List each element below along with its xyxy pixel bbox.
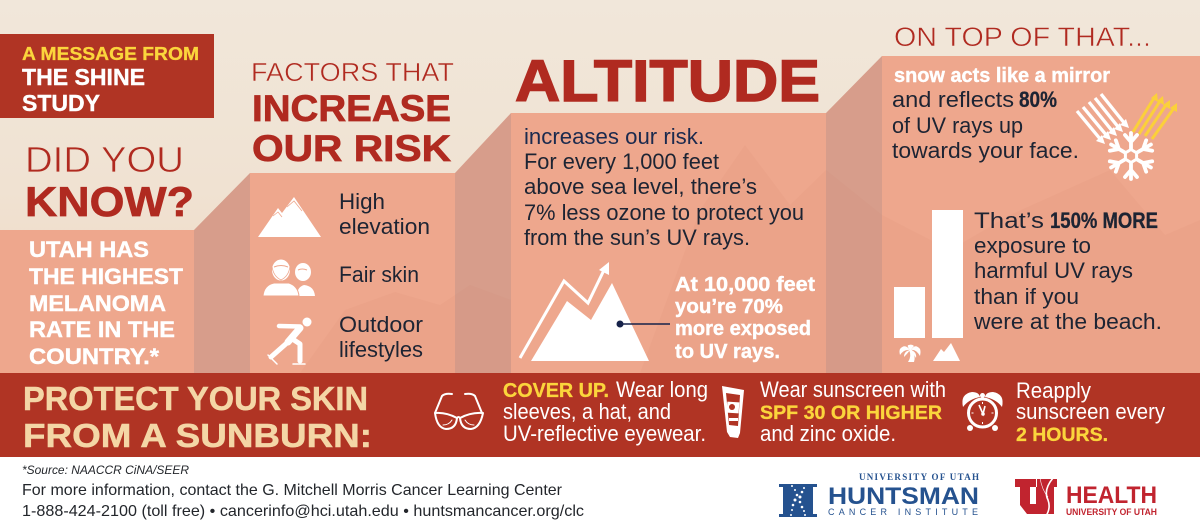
icon: mountain <box>258 197 321 237</box>
background sky <box>0 0 1200 380</box>
icon: people <box>263 259 315 296</box>
snow text: of UV rays up <box>892 113 1023 138</box>
heading: on top of that: ON TOP OF THAT... <box>894 22 1151 52</box>
footer contact text: 1-888-424-2100 (toll free) • cancerinfo@hci.utah.edu • huntsmancancer.org/clc <box>22 503 584 520</box>
logo mark <box>1015 478 1057 516</box>
utah statistic: MELANOMA <box>29 291 166 316</box>
cover up text: COVER UP. <box>503 380 609 402</box>
heading: altitude: ALTITUDE <box>515 49 820 114</box>
message box: A MESSAGE FROM <box>22 44 199 64</box>
altitude body text: above sea level, there’s <box>524 174 757 199</box>
icon: white rays <box>1077 94 1129 144</box>
heading: protect your skin: FROM A SUNBURN: <box>23 417 372 454</box>
snow text: snow acts like a mirror <box>894 65 1110 87</box>
sunscreen text: and zinc oxide. <box>760 421 896 446</box>
snow text <box>892 65 1110 163</box>
logo: university of utah health <box>1015 478 1157 518</box>
panel: altitude <box>511 113 826 373</box>
cover up text: sleeves, a hat, and <box>503 399 671 424</box>
icon: sunscreen tube <box>722 386 744 438</box>
reapply text: Reapply <box>1016 378 1091 403</box>
exposure text: were at the beach. <box>973 309 1162 334</box>
factor: outdoor lifestyles: lifestyles <box>339 337 423 362</box>
heading: did you know: KNOW? <box>25 178 194 225</box>
reapply text: 2 HOURS. <box>1016 425 1108 446</box>
bar chart: beach vs mountains <box>894 210 963 362</box>
logo: huntsman cancer institute <box>779 472 979 517</box>
panel: protect band <box>0 373 1200 457</box>
factor: outdoor lifestyles <box>339 312 423 362</box>
reapply text: sunscreen every <box>1016 399 1165 424</box>
snow text: towards your face. <box>892 138 1079 163</box>
icon: alarm clock <box>962 392 1003 431</box>
panel: did you know <box>0 230 194 373</box>
callout line <box>616 320 670 328</box>
footer contact text: For more information, contact the G. Mitchell Morris Cancer Learning Center <box>22 482 563 499</box>
utah statistic: THE HIGHEST <box>29 264 184 289</box>
heading: did you know <box>25 139 194 225</box>
utah statistic: COUNTRY.* <box>29 344 159 369</box>
message box: THE SHINE <box>22 64 145 90</box>
footer contact text <box>22 465 584 520</box>
footer contact text: *Source: NAACCR CiNA/SEER <box>22 465 189 477</box>
cover up text <box>503 377 708 446</box>
altitude body text: For every 1,000 feet <box>524 149 719 174</box>
message box: STUDY <box>22 90 100 116</box>
sunscreen text: SPF 30 OR HIGHER <box>760 403 942 424</box>
panel: factors <box>250 173 455 373</box>
callout: 10,000 feet: you’re 70% <box>675 296 783 318</box>
exposure text: 150% MORE <box>1050 208 1158 233</box>
icon: yellow rays <box>1133 93 1177 139</box>
exposure text: than if you <box>974 284 1079 309</box>
utah statistic: RATE IN THE <box>29 317 175 342</box>
heading: protect your skin <box>23 380 372 454</box>
panel: step shade one <box>194 173 250 373</box>
sunscreen text <box>760 377 946 446</box>
heading: factors: INCREASE <box>252 88 451 129</box>
callout: 10,000 feet: to UV rays. <box>675 341 780 363</box>
exposure text <box>973 208 1162 334</box>
logo: university of utah health: HEALTH <box>1066 482 1157 509</box>
factor: high elevation <box>339 189 430 239</box>
exposure text: That’s <box>974 208 1044 233</box>
icon: mountain with rising arrow <box>520 262 649 361</box>
factor: fair skin: Fair skin <box>339 262 419 287</box>
factor: outdoor lifestyles: Outdoor <box>339 312 423 337</box>
reapply text <box>1016 378 1165 446</box>
altitude body text: 7% less ozone to protect you <box>524 200 804 225</box>
message box <box>0 34 214 118</box>
exposure text: harmful UV rays <box>974 258 1133 283</box>
logo: huntsman cancer institute: HUNTSMAN <box>828 483 979 510</box>
logo: university of utah health: UNIVERSITY OF UTAH <box>1066 507 1157 518</box>
callout: 10,000 feet <box>675 274 815 363</box>
cover up text: UV-reflective eyewear. <box>503 421 706 446</box>
exposure text: exposure to <box>974 233 1091 258</box>
logo mark <box>779 484 817 517</box>
icon: skater <box>268 318 312 364</box>
mountain texture <box>300 145 1200 373</box>
factor: high elevation: High <box>339 189 385 214</box>
heading: protect your skin: PROTECT YOUR SKIN <box>23 380 368 417</box>
heading: factors: FACTORS THAT <box>251 57 454 87</box>
icon: palm tree <box>900 345 920 362</box>
altitude body text <box>524 124 804 250</box>
factor: high elevation: elevation <box>339 214 430 239</box>
cover up text: Wear long <box>616 377 708 402</box>
icon: sunglasses <box>435 394 483 429</box>
utah statistic <box>29 237 184 369</box>
logo: huntsman cancer institute: UNIVERSITY OF UTAH <box>859 472 979 482</box>
icon: snowflake <box>1108 133 1154 179</box>
callout: 10,000 feet: more exposed <box>675 318 811 340</box>
panel: on top of that <box>882 56 1200 373</box>
icon: small mountain <box>933 343 960 361</box>
sunscreen text: Wear sunscreen with <box>760 377 946 402</box>
logo: huntsman cancer institute: CANCER INSTITUTE <box>828 507 978 517</box>
heading: factors: OUR RISK <box>252 128 451 169</box>
panel: step shade three <box>826 56 882 373</box>
callout: 10,000 feet: At 10,000 feet <box>675 274 815 296</box>
snow text: 80% <box>1019 87 1057 112</box>
heading: did you know: DID YOU <box>25 139 184 180</box>
heading: factors <box>251 57 454 169</box>
panel: step shade two <box>455 113 511 373</box>
altitude body text: from the sun’s UV rays. <box>524 225 750 250</box>
snow text: and reflects <box>892 87 1014 112</box>
utah statistic: UTAH HAS <box>29 237 149 262</box>
altitude body text: increases our risk. <box>524 124 704 149</box>
footer background <box>0 457 1200 524</box>
